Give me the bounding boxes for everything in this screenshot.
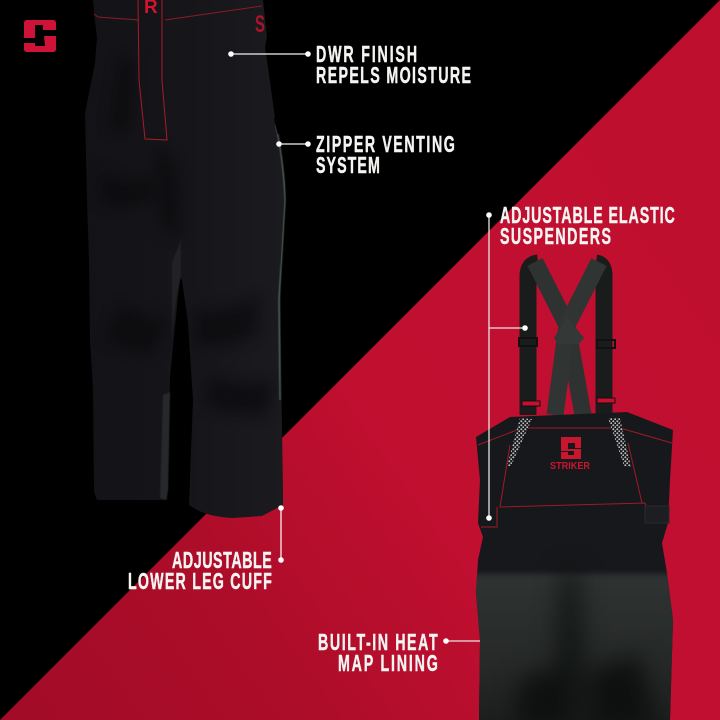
lower panel shading — [515, 570, 655, 720]
fabric shading — [120, 188, 267, 411]
outer leg piping — [276, 125, 285, 400]
callout: zipper venting: ZIPPER VENTING — [316, 133, 455, 158]
strap: right vertical — [596, 263, 604, 415]
garment body — [476, 412, 673, 720]
Striker logo on back — [550, 437, 591, 472]
callout: built-in heat map lining: MAP LINING — [338, 652, 438, 677]
reflective dots right — [608, 418, 631, 467]
callout: DWR finish — [228, 43, 471, 89]
strap: diagonal two — [555, 262, 599, 415]
callout: adjustable lower leg cuff: ADJUSTABLE — [172, 549, 272, 574]
callout: adjustable elastic suspenders — [486, 204, 675, 521]
strap: left vertical — [528, 263, 538, 415]
waist seam stitching — [94, 6, 262, 20]
red strap tabs — [522, 398, 615, 406]
red stitching — [478, 428, 672, 527]
callout: built-in heat map lining — [318, 631, 480, 677]
callout: zipper venting — [276, 133, 455, 179]
side panel, upper — [172, 240, 181, 340]
strap: diagonal one — [535, 262, 583, 415]
callout: zipper venting: SYSTEM — [316, 154, 380, 179]
callout: built-in heat map lining: BUILT-IN HEAT — [318, 631, 438, 656]
callout: adjustable elastic suspenders: SUSPENDERS — [500, 225, 611, 250]
calf panel — [160, 392, 170, 500]
placket stitching — [138, 0, 167, 140]
red S mark on bib side: S — [255, 12, 265, 38]
product: bib pants back view — [470, 262, 680, 720]
callout: DWR finish: DWR FINISH — [316, 43, 417, 68]
callout: DWR finish: REPELS MOISTURE — [316, 64, 471, 89]
reflective dots left — [507, 418, 532, 466]
Striker logo on back: STRIKER — [550, 461, 591, 472]
callout: adjustable elastic suspenders: ADJUSTABLE ELASTIC — [500, 204, 675, 229]
heat map lining lower panel — [470, 570, 680, 720]
pants silhouette — [85, 0, 285, 518]
logo: Striker S mark — [24, 20, 56, 52]
strap sliders — [519, 338, 615, 348]
callout: adjustable lower leg cuff — [128, 505, 284, 595]
callout: adjustable lower leg cuff: LOWER LEG CUFF — [128, 570, 272, 595]
waist tab — [645, 506, 669, 523]
product: bib pants front view — [85, 0, 285, 518]
strap junction — [554, 317, 584, 344]
